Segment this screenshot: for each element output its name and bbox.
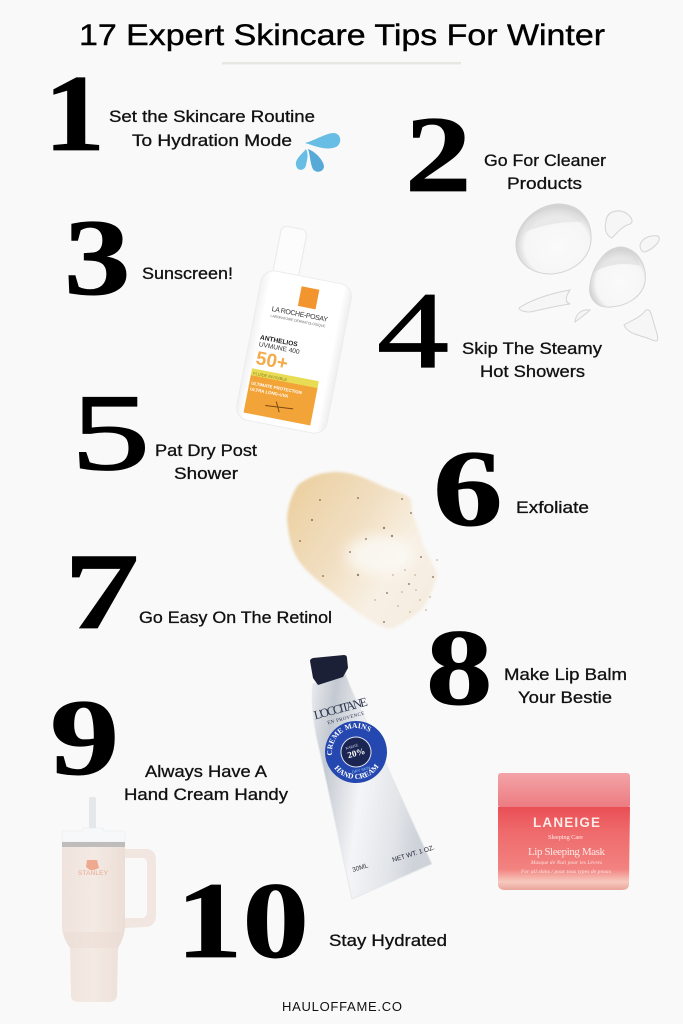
product: hand cream tube: NET WT. 1 OZ. [392,844,436,864]
product: hand cream tube: 30ML [352,862,370,874]
number 2: 2 [405,95,471,215]
tube body [312,672,432,899]
tip 1 text: Set the Skincare Routine [109,108,315,126]
tip 9 text: Always Have A [145,763,267,781]
product: sunscreen bottle: 50+ [254,348,290,375]
tip 8 [426,608,627,728]
product: sunscreen bottle: LABORATOIRE DERMATOLOGIQUE [270,314,326,329]
product: sunscreen bottle [234,223,362,435]
icon: water droplets [516,204,659,341]
tip 7 text: Go Easy On The Retinol [139,609,332,627]
tip 10 text: Stay Hydrated [329,932,447,950]
tip 1 text [109,108,315,150]
number 3: 3 [64,198,130,318]
icon: water splash [296,133,340,172]
jar label: Masque de Nuit pour les Lèvres [530,860,602,866]
tube label: HAND CREAM [334,764,379,779]
tip 4 [377,270,603,391]
product: sunscreen bottle: FLUIDE INVISIBLE [253,371,288,382]
product: lip sleeping mask jar [498,773,630,890]
stanley logo [78,860,109,877]
lid [62,828,125,842]
tube label: L'OCCITANE [312,695,369,722]
number 10: 10 [176,861,309,981]
number 9: 9 [50,677,119,798]
tip 6 text: Exfoliate [516,499,589,517]
tube label [312,695,387,783]
tip 5 text: Pat Dry Post [155,442,257,460]
straw [89,797,96,829]
tip 8 text [504,666,627,707]
tube label: CREME MAINS [327,723,372,756]
product: sunscreen bottle: UVMUNE 400 [258,341,300,356]
tip 8 text: Make Lip Balm [504,666,627,684]
tip 2 [405,95,607,215]
tube label: KARITÉ [345,742,359,750]
number 4: 4 [377,270,449,391]
product: hand cream tube [310,655,436,900]
tip 4 text: Hot Showers [480,363,585,381]
tip 3 [64,198,233,318]
tip 2 text: Go For Cleaner [484,152,607,170]
jar label: LANEIGE [533,815,600,830]
cup body [62,847,125,1002]
tip 5 text: Shower [174,465,239,483]
tip 7 [64,532,332,652]
product: sunscreen bottle: ULTRA LONG-UVA [250,386,289,399]
tip 10 [176,861,447,981]
handle [124,849,156,928]
jar lid [498,773,630,808]
product: sunscreen bottle: ULTIMATE PROTECTION [251,380,302,395]
tube label: 20% [346,746,366,760]
tip 3 text: Sunscreen! [142,265,233,283]
number 1: 1 [44,54,105,174]
jar label: For all skins / pour tous types de peaux [520,869,612,875]
tip 5 text [155,442,257,483]
stanley logo: STANLEY [78,870,109,877]
product: stanley tumbler [62,797,156,1002]
tube label: DRY SKIN [351,765,371,775]
jar base [498,807,630,890]
tip 6 [433,428,589,549]
jar label: Lip Sleeping Mask [528,846,606,858]
product: exfoliating scrub smear [287,472,438,628]
tip 9 text: Hand Cream Handy [124,786,289,804]
number 7: 7 [64,532,139,652]
footer website: HAULOFFAME.CO [282,999,402,1014]
tip 2 text [484,152,607,193]
jar label [520,815,612,875]
tip 1 [44,54,315,174]
tip 1 text: To Hydration Mode [132,132,292,150]
number 8: 8 [426,608,492,728]
jar label: Sleeping Care [548,834,583,841]
title: 17 Expert Skincare Tips For Winter [79,19,605,52]
tip 9 [50,677,289,804]
number 5: 5 [71,373,150,493]
tip 5 [71,373,257,493]
tube label: EN PROVENCE [327,712,365,726]
product: sunscreen bottle: LA ROCHE-POSAY [271,306,329,324]
tube cap [310,655,348,685]
tip 4 text: Skip The Steamy [462,340,603,358]
number 6: 6 [433,428,503,549]
tip 4 text [462,340,603,381]
tip 9 text [124,763,289,804]
metal band [62,842,125,847]
product: sunscreen bottle: ANTHELIOS [259,334,299,349]
tip 2 text: Products [507,175,582,193]
tip 8 text: Your Bestie [518,689,612,707]
